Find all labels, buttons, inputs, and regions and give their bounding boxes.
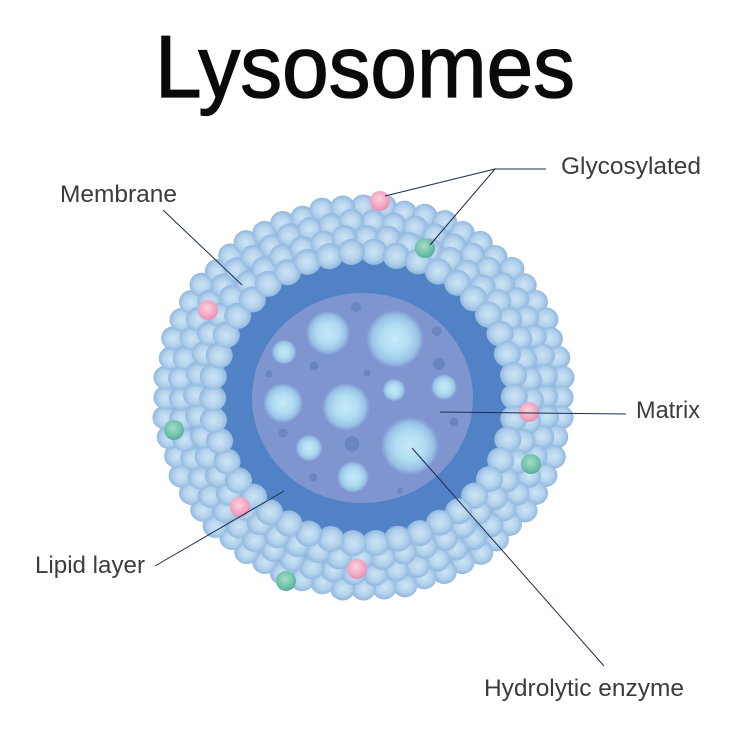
matrix xyxy=(252,293,473,503)
label: Hydrolytic enzyme: Hydrolytic enzyme xyxy=(484,675,684,702)
label: Glycosylated: Glycosylated xyxy=(561,153,701,180)
label: Membrane: Membrane xyxy=(60,181,177,208)
label: Lipid layer: Lipid layer xyxy=(35,552,145,579)
lysosome diagram xyxy=(91,147,636,648)
hydrolytic enzymes xyxy=(263,310,457,493)
label: Lipid layer xyxy=(35,491,284,579)
pink glycoproteins xyxy=(198,191,539,579)
label: Glycosylated xyxy=(385,153,701,245)
label: Membrane xyxy=(60,181,242,285)
label: Matrix: Matrix xyxy=(636,397,700,424)
small dark granules xyxy=(266,302,458,494)
green glycoproteins xyxy=(164,238,541,591)
title: Lysosomes xyxy=(155,17,575,116)
label: Hydrolytic enzyme xyxy=(412,448,684,702)
lipid bead membrane xyxy=(91,147,636,648)
